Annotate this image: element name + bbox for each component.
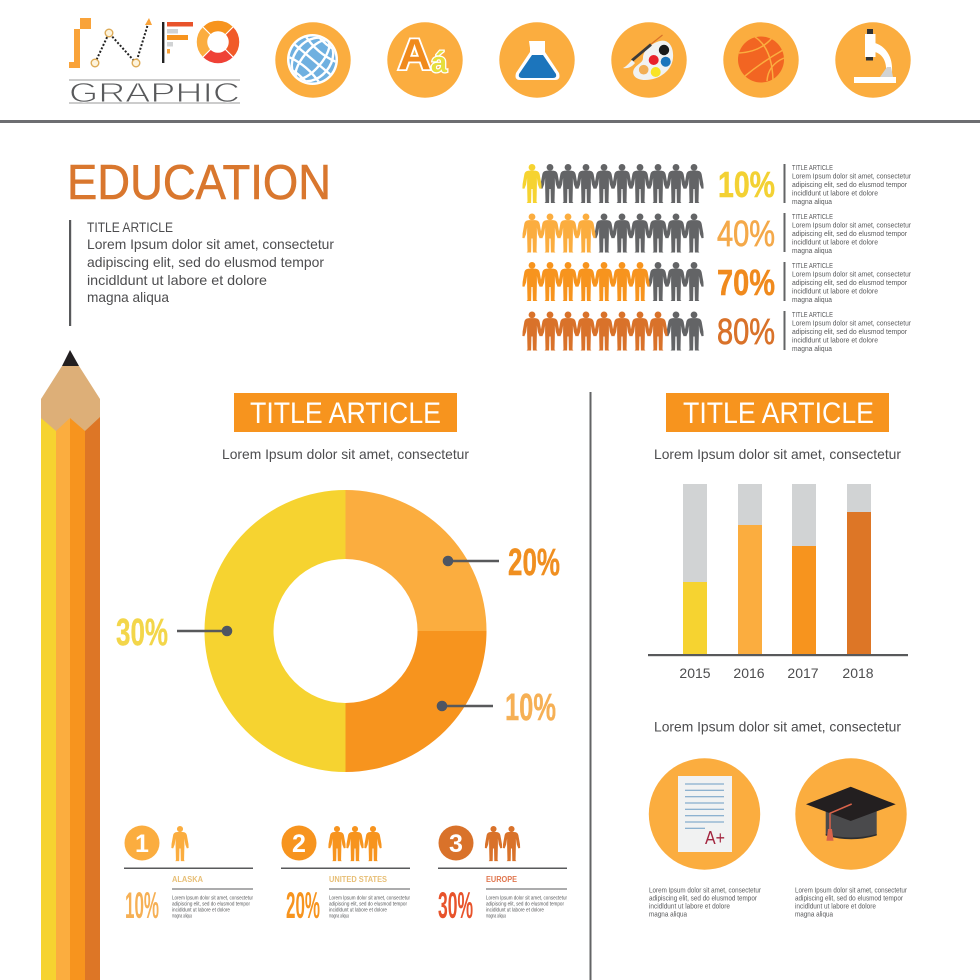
- stat: alaska: magna aliqua: [172, 914, 192, 920]
- people row 4: [522, 312, 704, 350]
- icon: globe: [275, 22, 351, 98]
- callout 20%: [443, 542, 560, 584]
- stat: alaska: Lorem Ipsum dolor sit amet, consectetur: [172, 896, 253, 902]
- logo letter O ring: [202, 26, 234, 58]
- stat: europe: adipiscing elit, sed do elusmod tempor: [486, 902, 564, 908]
- bar chart caption: Lorem Ipsum dolor sit amet, consectetur: [654, 446, 901, 462]
- axis labels: [679, 665, 874, 681]
- number badge 3: 3: [449, 830, 463, 858]
- title box left: TITLE ARTICLE: [250, 397, 441, 430]
- people: [485, 826, 520, 861]
- icon: paint palette: [611, 22, 687, 98]
- stat: united states: Lorem Ipsum dolor sit amet, consectetur: [329, 896, 410, 902]
- row 3 caption: adipiscing elit, sed do elusmod tempor: [792, 280, 908, 287]
- people row 3: [522, 262, 704, 301]
- row 4 caption: magna aliqua: [792, 346, 832, 353]
- segment 30%: [204, 490, 346, 772]
- row 4 caption: incidldunt ut labore et dolore: [792, 338, 878, 344]
- bar 2018: [847, 484, 871, 654]
- cap caption: incidldunt ut labore et dolore: [795, 904, 876, 910]
- cap caption: magna aliqua: [795, 912, 833, 918]
- number badge 1: 1: [135, 830, 149, 858]
- bar 2015: [683, 484, 707, 654]
- logo letter F bars: [162, 22, 193, 63]
- row 2 caption: TITLE ARTICLE: [792, 214, 833, 221]
- intro text block: magna aliqua: [87, 289, 169, 305]
- stat: alaska: ALASKA: [172, 875, 203, 884]
- donut caption: Lorem Ipsum dolor sit amet, consectetur: [222, 446, 469, 462]
- row 1 caption: TITLE ARTICLE: [792, 165, 833, 172]
- percent 80: 80%: [717, 311, 775, 352]
- pictogram row 80%: [522, 311, 912, 353]
- pencil illustration: [41, 350, 100, 980]
- pictogram row 70%: [522, 262, 912, 304]
- icon: graded paper: A+: [705, 828, 725, 848]
- paper caption: Lorem Ipsum dolor sit amet, consectetur: [649, 888, 762, 894]
- row 2 caption: Lorem Ipsum dolor sit amet, consectetur: [792, 222, 912, 230]
- logo letter I: [69, 18, 91, 68]
- icon: letters: [387, 22, 463, 98]
- people row 1: [522, 164, 704, 203]
- number badge 2: 2: [292, 830, 306, 858]
- icon: basketball: [723, 22, 799, 98]
- percent 40: 40%: [717, 213, 775, 254]
- percent 70: 70%: [717, 262, 775, 303]
- axis labels: 2017: [787, 665, 819, 681]
- row 3 caption: incidldunt ut labore et dolore: [792, 288, 878, 296]
- stat: alaska: [124, 826, 253, 926]
- intro text block: [69, 219, 334, 326]
- stat: alaska: 10%: [125, 885, 159, 926]
- row 1 caption: [784, 164, 912, 206]
- header divider: [0, 120, 980, 123]
- donut chart: [204, 490, 486, 772]
- icon: letters: A: [398, 30, 431, 79]
- logo: info graphic: [69, 18, 240, 108]
- axis: [648, 654, 908, 656]
- cap caption: Lorem Ipsum dolor sit amet, consectetur: [795, 888, 908, 894]
- bar chart: [648, 484, 908, 681]
- intro text block: incidldunt ut labore et dolore: [87, 272, 267, 288]
- logo word GRAPHIC: GRAPHIC: [69, 77, 240, 108]
- row 3 caption: magna aliqua: [792, 297, 832, 304]
- paper caption: adipiscing elit, sed do elusmod tempor: [649, 896, 758, 902]
- stat: united states: incidldunt ut labore et dolore: [329, 908, 387, 914]
- stat: united states: magna aliqua: [329, 914, 349, 920]
- callout 20%: 20%: [508, 542, 560, 584]
- row 4 caption: adipiscing elit, sed do elusmod tempor: [792, 329, 908, 336]
- stat: alaska: adipiscing elit, sed do elusmod tempor: [172, 902, 250, 908]
- row 1 caption: Lorem Ipsum dolor sit amet, consectetur: [792, 174, 912, 180]
- paper caption: incidldunt ut labore et dolore: [649, 904, 730, 910]
- logo letter N chart: [91, 18, 152, 67]
- heading: education: EDUCATION: [67, 156, 331, 210]
- icon: flask: [499, 22, 575, 98]
- row 3 caption: Lorem Ipsum dolor sit amet, consectetur: [792, 272, 912, 278]
- row 1 caption: magna aliqua: [792, 199, 832, 206]
- bar 2017: [792, 484, 816, 654]
- stat: europe: EUROPE: [486, 875, 518, 884]
- segment 10%: [346, 631, 486, 772]
- vertical divider: [590, 392, 592, 980]
- title box right: TITLE ARTICLE: [683, 397, 874, 430]
- stat: europe: 30%: [438, 885, 473, 926]
- segment 20%: [346, 490, 486, 631]
- row 3 caption: TITLE ARTICLE: [792, 263, 833, 270]
- stat: europe: incidldunt ut labore et dolore: [486, 908, 544, 914]
- stat: alaska: incidldunt ut labore et dolore: [172, 908, 230, 914]
- icon: graded paper: [649, 758, 760, 870]
- row 2 caption: magna aliqua: [792, 248, 832, 255]
- row 4 caption: [784, 311, 912, 353]
- row 1 caption: adipiscing elit, sed do elusmod tempor: [792, 182, 908, 189]
- cap caption: [795, 888, 908, 918]
- paper caption: [649, 888, 762, 918]
- callout 10%: [437, 687, 556, 729]
- people: [328, 826, 382, 861]
- pictogram row 40%: [522, 213, 912, 255]
- stat: united states: adipiscing elit, sed do elusmod tempor: [329, 902, 407, 908]
- row 4 caption: TITLE ARTICLE: [792, 312, 833, 319]
- row 4 caption: Lorem Ipsum dolor sit amet, consectetur: [792, 320, 912, 328]
- axis labels: 2015: [679, 665, 711, 681]
- callout 30%: 30%: [116, 612, 168, 654]
- icons caption: Lorem Ipsum dolor sit amet, consectetur: [654, 718, 901, 734]
- stat: europe: Lorem Ipsum dolor sit amet, consectetur: [486, 896, 567, 902]
- intro text block: TITLE ARTICLE: [87, 219, 173, 235]
- stat: europe: magna aliqua: [486, 914, 506, 920]
- row 1 caption: incidldunt ut labore et dolore: [792, 190, 878, 198]
- callout 30%: [116, 612, 232, 654]
- stat: united states: 20%: [286, 885, 320, 926]
- pictogram row 10%: [522, 164, 912, 206]
- intro text block: adipiscing elit, sed do elusmod tempor: [87, 254, 324, 270]
- people row 2: [522, 214, 704, 252]
- stat: europe: [438, 826, 567, 926]
- row 2 caption: [784, 213, 912, 255]
- row 2 caption: adipiscing elit, sed do elusmod tempor: [792, 231, 908, 238]
- people: [171, 826, 189, 861]
- axis labels: 2016: [733, 665, 765, 681]
- axis labels: 2018: [842, 665, 874, 681]
- icon: microscope: [835, 22, 911, 98]
- icon: letters: á: [431, 47, 448, 79]
- intro text block: Lorem Ipsum dolor sit amet, consectetur: [87, 236, 334, 252]
- row 2 caption: incidldunt ut labore et dolore: [792, 240, 878, 246]
- paper caption: magna aliqua: [649, 912, 687, 918]
- stat: united states: UNITED STATES: [329, 875, 388, 884]
- cap caption: adipiscing elit, sed do elusmod tempor: [795, 896, 904, 902]
- callout 10%: 10%: [505, 687, 556, 729]
- percent 10: 10%: [718, 164, 775, 205]
- stat: united states: [281, 826, 410, 926]
- row 3 caption: [784, 262, 912, 304]
- bar 2016: [738, 484, 762, 654]
- icon: graduation cap: [795, 758, 907, 870]
